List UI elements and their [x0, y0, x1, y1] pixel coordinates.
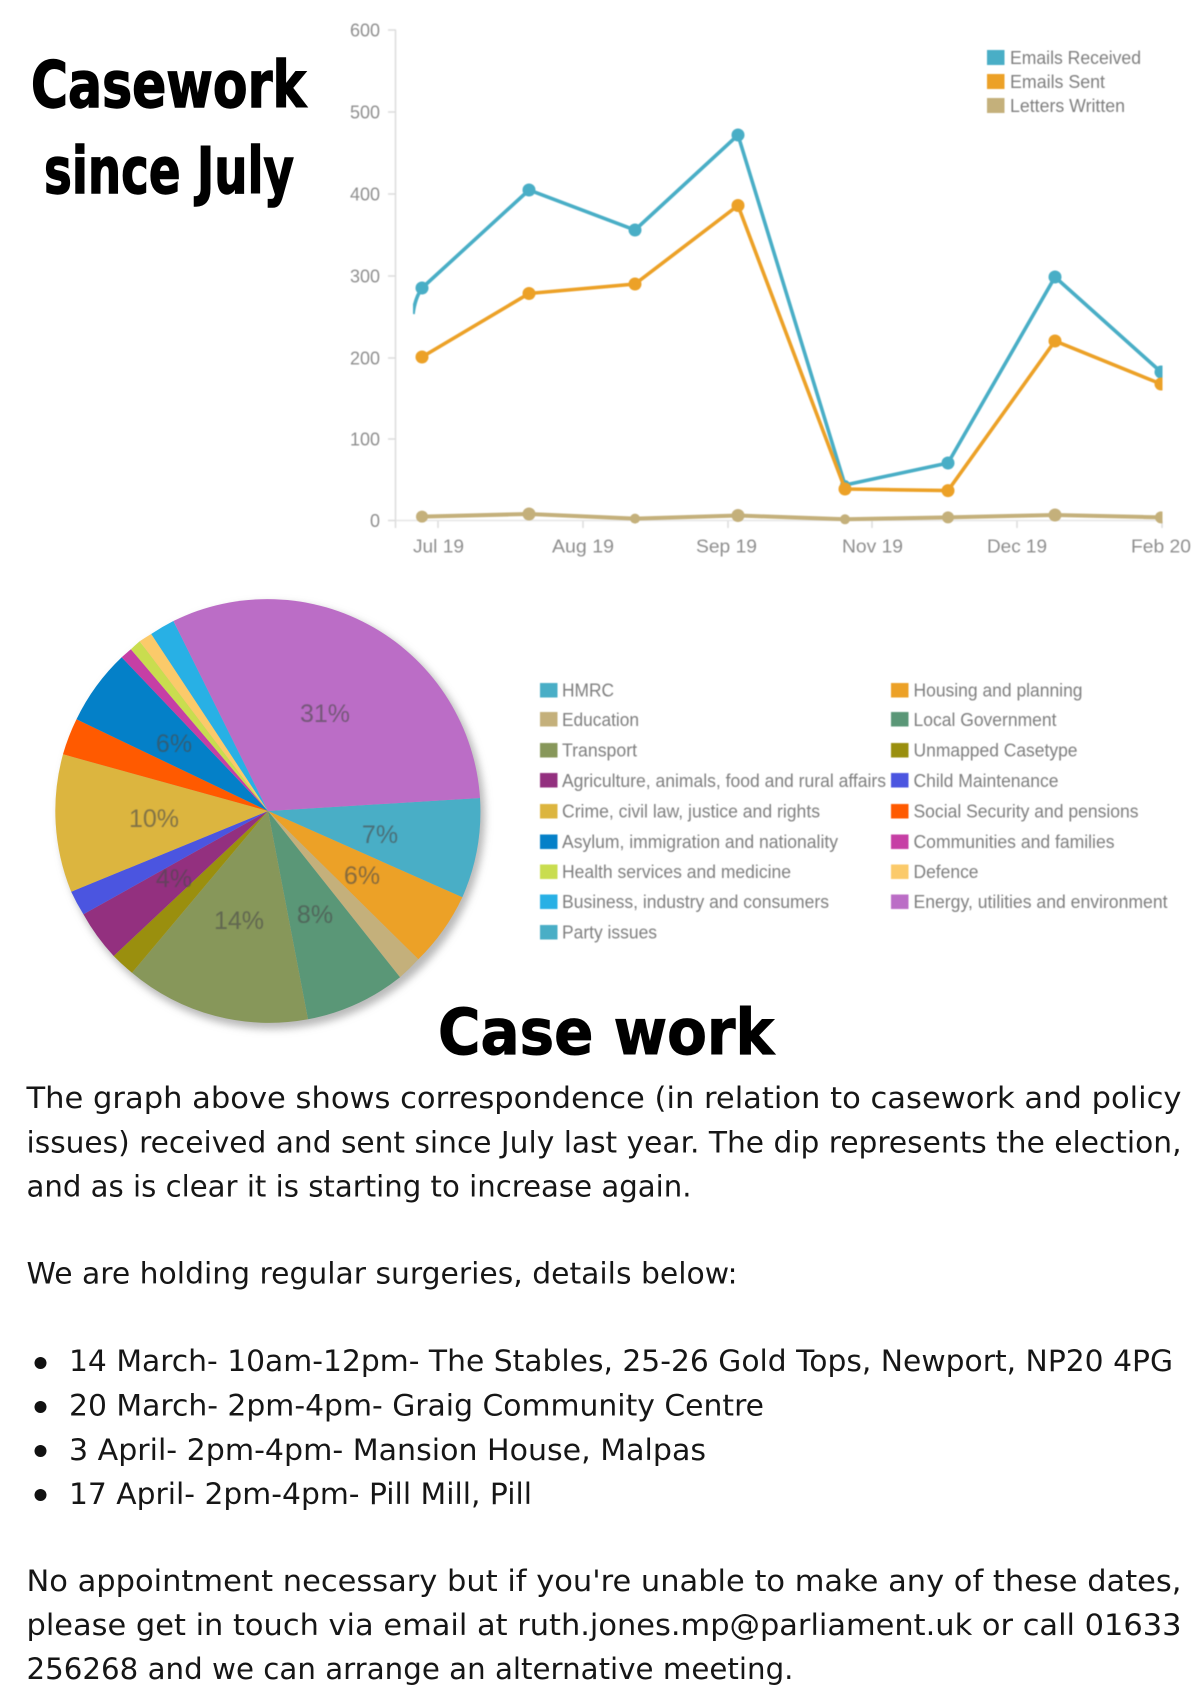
pie legend	[540, 680, 1168, 942]
y axis labels	[350, 20, 380, 531]
y axis labels: 500	[350, 102, 380, 122]
y axis labels: 400	[350, 184, 380, 204]
list: surgery dates	[34, 1344, 1173, 1511]
y axis labels: 600	[350, 20, 380, 40]
pie percentage labels: 14%	[214, 907, 264, 935]
x axis labels: Dec 19	[987, 536, 1047, 556]
pie percentage labels: 31%	[300, 700, 350, 728]
title: Casework since July	[31, 49, 307, 209]
text block: contact details	[26, 1564, 1182, 1686]
chart legend: Emails Sent	[1010, 72, 1105, 92]
heading: Case work: Case work	[438, 996, 776, 1069]
list: surgery dates: 3 April- 2pm-4pm- Mansion House, Malpas	[69, 1433, 706, 1467]
line chart: correspondence since July	[350, 20, 1191, 556]
text block: contact details: No appointment necessary but if you're unable to make any of these dates,	[26, 1564, 1182, 1598]
pie legend: Asylum, immigration and nationality	[562, 832, 838, 852]
x axis labels: Nov 19	[842, 536, 903, 556]
pie legend: Social Security and pensions	[914, 802, 1138, 822]
y axis labels: 200	[350, 348, 380, 368]
title: Casework since July: Casework	[31, 49, 307, 123]
pie percentage labels: 10%	[129, 805, 179, 833]
pie legend: Education	[562, 710, 639, 730]
pie legend: Child Maintenance	[914, 771, 1058, 791]
list: surgery dates: 17 April- 2pm-4pm- Pill Mill, Pill	[69, 1477, 532, 1511]
pie legend: Transport	[562, 740, 637, 760]
chart legend: Emails Received	[1010, 48, 1141, 68]
pie legend: Business, industry and consumers	[562, 892, 829, 912]
y axis labels: 300	[350, 266, 380, 286]
pie percentage labels: 4%	[156, 865, 192, 893]
series: Letters Written	[416, 508, 1167, 524]
pie legend: Defence	[914, 862, 978, 882]
chart legend: Letters Written	[1010, 96, 1125, 116]
text block: contact details: 256268 and we can arrange an alternative meeting.	[26, 1652, 794, 1686]
pie percentage labels: 6%	[344, 862, 380, 890]
series: Emails Received	[413, 128, 1168, 490]
text block: graph explanation	[25, 1081, 1181, 1204]
pie legend: Party issues	[562, 922, 657, 942]
pie legend: HMRC	[562, 680, 614, 700]
list: surgery dates: 20 March- 2pm-4pm- Graig Community Centre	[69, 1388, 764, 1422]
text block: graph explanation: issues) received and sent since July last year. The dip represents the election,	[26, 1126, 1182, 1160]
x axis labels: Aug 19	[552, 536, 614, 556]
pie legend: Housing and planning	[914, 680, 1082, 700]
x axis labels: Jul 19	[413, 536, 464, 556]
text block: graph explanation: The graph above shows correspondence (in relation to casework and policy	[25, 1081, 1181, 1115]
chart axes	[388, 30, 1162, 528]
text block: surgeries intro: We are holding regular surgeries, details below:	[26, 1256, 738, 1290]
y axis labels: 0	[370, 511, 380, 531]
chart legend	[987, 48, 1141, 116]
pie percentage labels: 8%	[297, 901, 333, 929]
title: Casework since July: since July	[44, 135, 294, 209]
pie slices	[55, 599, 480, 1023]
series: Emails Sent	[416, 199, 1168, 497]
text block: graph explanation: and as is clear it is starting to increase again.	[26, 1170, 692, 1204]
pie percentage labels	[129, 700, 398, 935]
pie percentage labels: 6%	[156, 730, 192, 758]
pie legend: Agriculture, animals, food and rural affairs	[562, 771, 886, 791]
pie legend: Health services and medicine	[562, 862, 791, 882]
text block: contact details: please get in touch via email at ruth.jones.mp@parliament.uk or call 01633	[26, 1608, 1182, 1642]
pie legend: Crime, civil law, justice and rights	[562, 802, 820, 822]
pie legend: Energy, utilities and environment	[914, 892, 1168, 912]
pie legend: Communities and families	[914, 832, 1114, 852]
pie shadow	[59, 603, 485, 1029]
pie legend: Local Government	[914, 710, 1056, 730]
x axis labels: Feb 20	[1131, 536, 1191, 556]
x axis labels: Sep 19	[696, 536, 757, 556]
pie legend: Unmapped Casetype	[914, 740, 1078, 760]
pie chart: casework by topic	[55, 599, 485, 1029]
y axis labels: 100	[350, 430, 380, 450]
x axis labels	[413, 536, 1191, 556]
list: surgery dates: 14 March- 10am-12pm- The Stables, 25-26 Gold Tops, Newport, NP20 4PG	[69, 1344, 1173, 1378]
pie percentage labels: 7%	[362, 821, 398, 849]
